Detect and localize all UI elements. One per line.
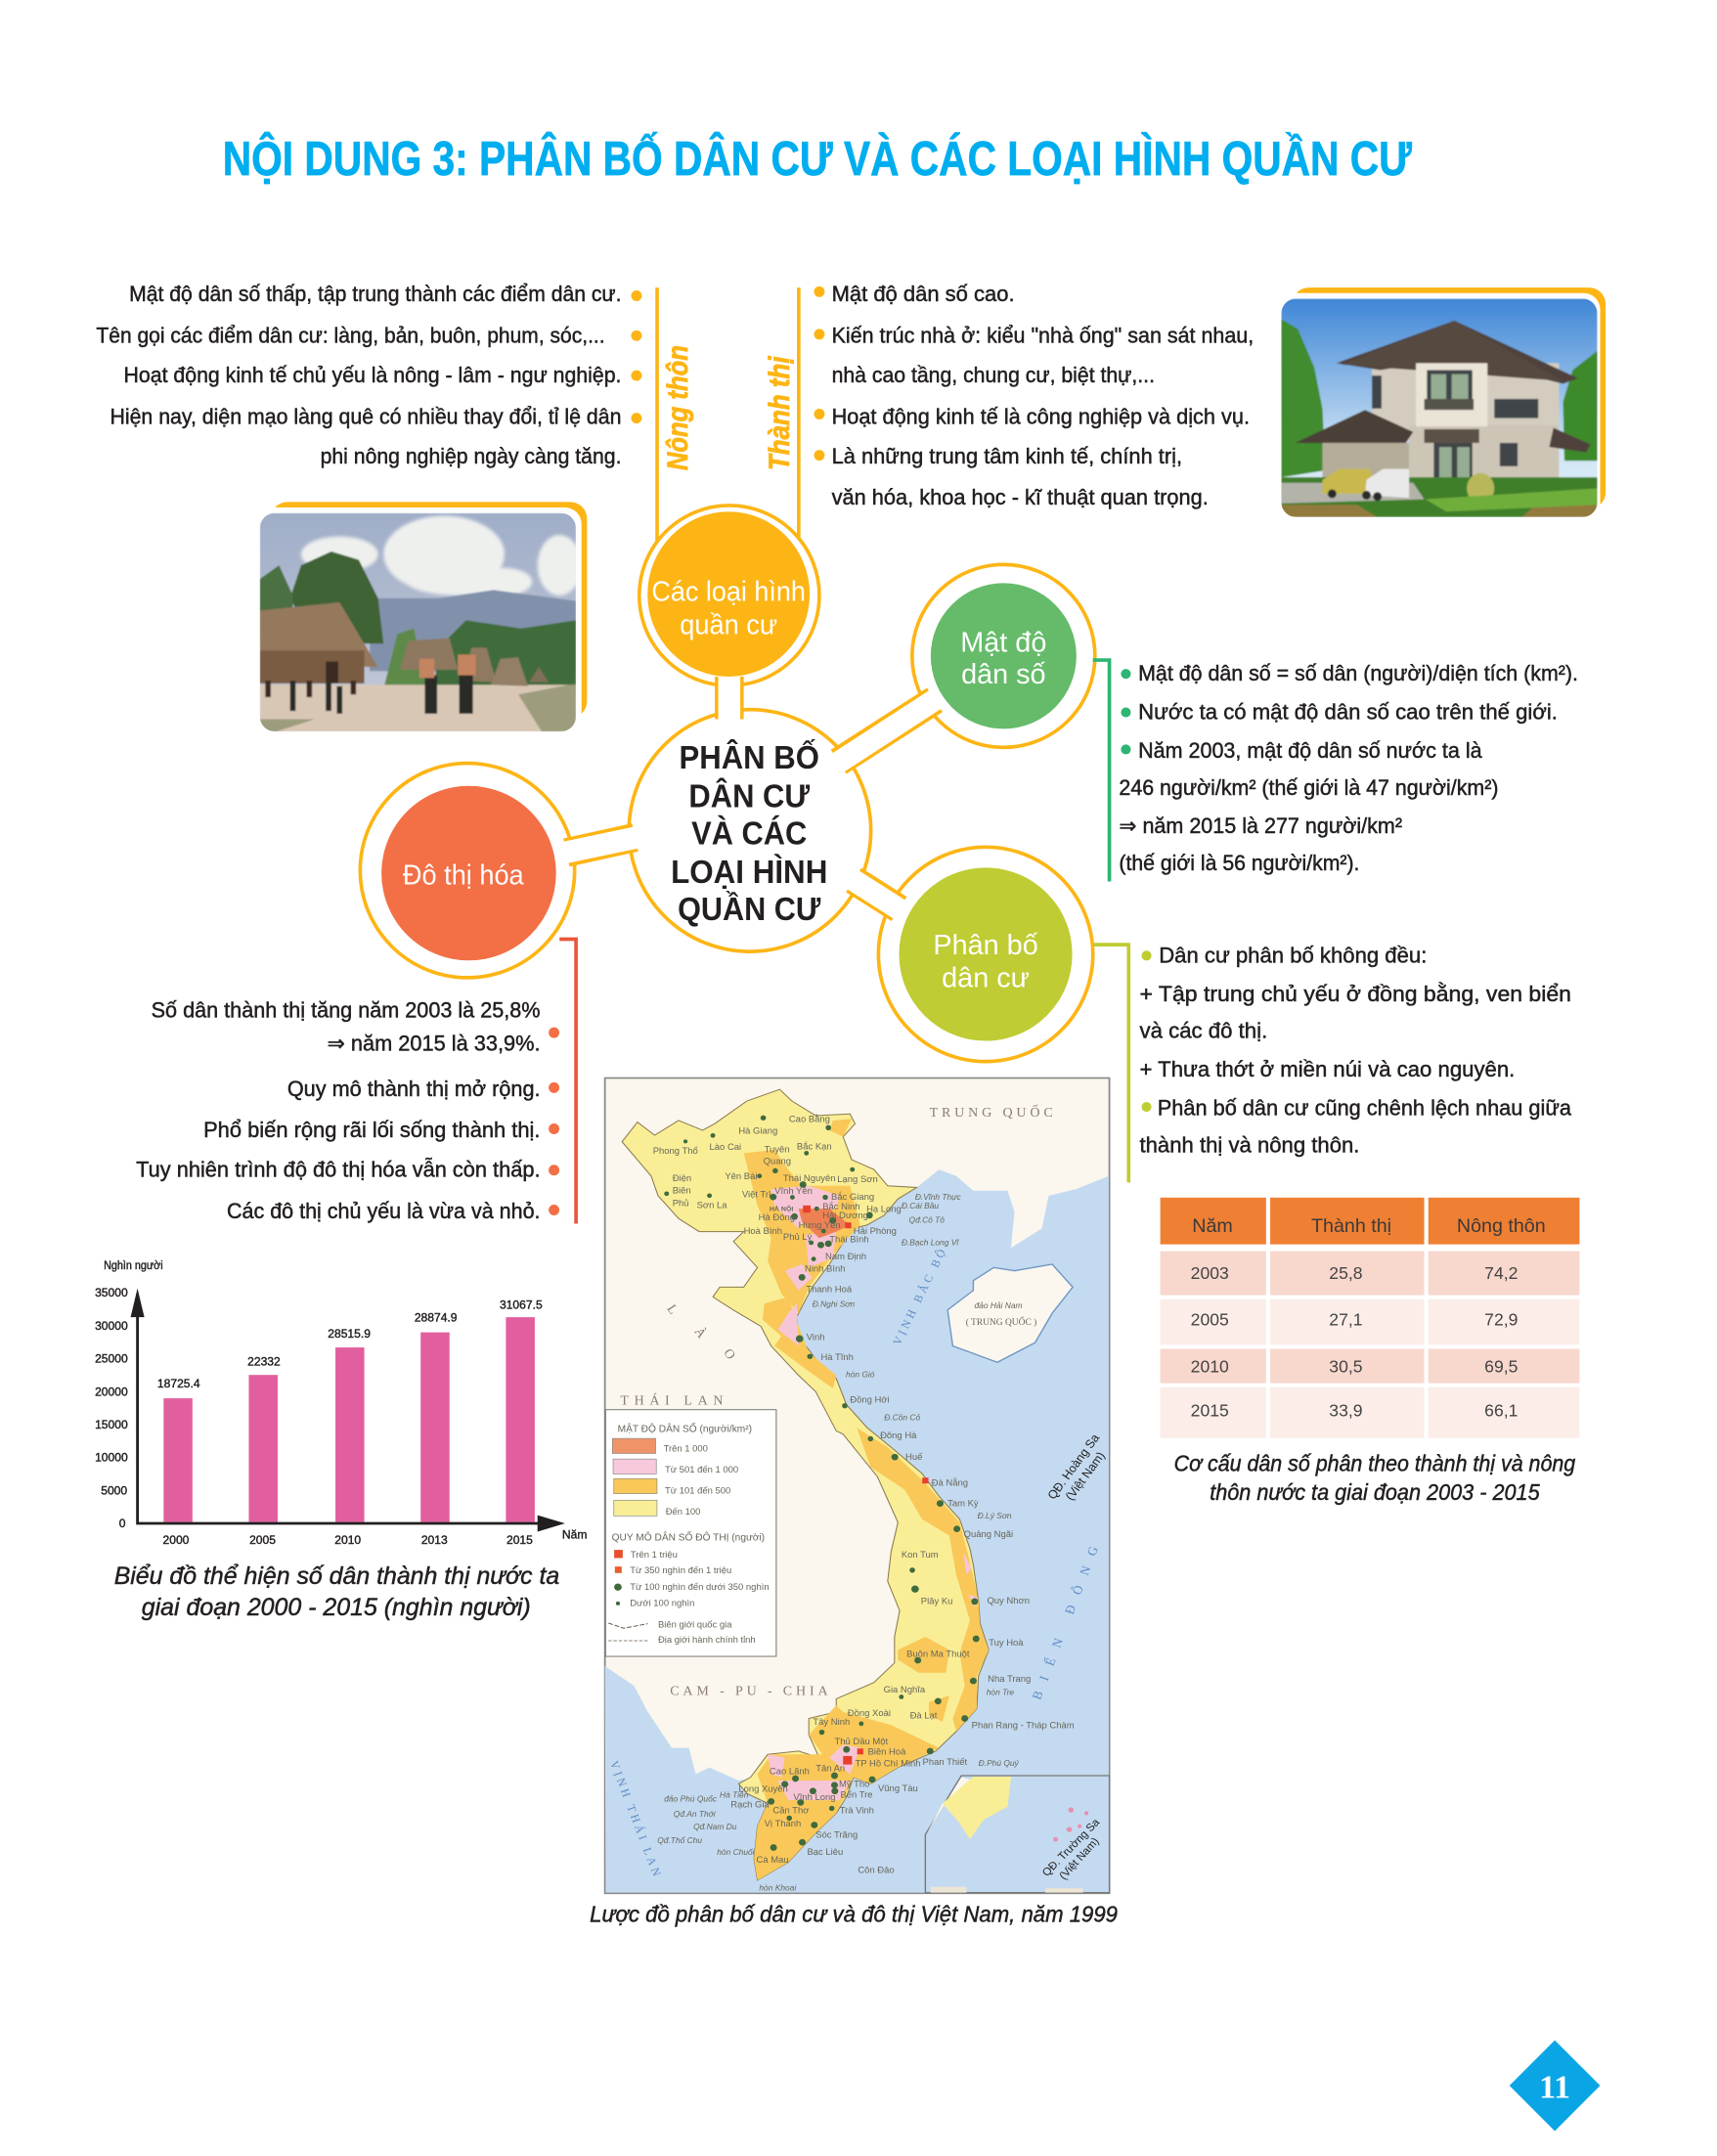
place labels: Cao Bằng	[789, 1115, 830, 1124]
place labels: Hải Dương	[822, 1210, 868, 1220]
place labels: Tuyên	[765, 1145, 790, 1155]
legend: MẬT ĐỘ DÂN SỐ (người/km²)	[618, 1424, 752, 1434]
place labels: Lào Cai	[710, 1142, 741, 1152]
place labels	[653, 1115, 1075, 1893]
country and sea labels: L	[664, 1301, 683, 1319]
connector pipes	[558, 671, 943, 914]
place labels: Rạch Giá	[730, 1800, 770, 1810]
place labels: Hoà Bình	[744, 1226, 782, 1236]
place labels: Đông Hà	[880, 1430, 917, 1440]
table: urban and rural structure: Thành thị	[1311, 1215, 1391, 1237]
place labels: Thủ Dầu Một	[834, 1737, 889, 1746]
country and sea labels: QĐ. Hoàng Sa	[1045, 1431, 1102, 1502]
place labels: Trà Vinh	[840, 1806, 874, 1815]
node: urbanization: Đô thị hóa	[403, 859, 525, 891]
text block: density: Nước ta có mật độ dân số cao trên thế giới.	[1138, 700, 1558, 725]
place labels: Đ.Cồn Cỏ	[884, 1414, 921, 1423]
text block: distribution: + Thưa thớt ở miền núi và cao nguyên.	[1140, 1057, 1515, 1081]
place labels: Đồng Hới	[850, 1395, 890, 1404]
bracket: distribution	[1093, 945, 1128, 1182]
density patches: over 1000	[799, 1209, 850, 1238]
bar chart: urban population: Nghìn người	[104, 1258, 163, 1272]
place labels: Cần Thơ	[772, 1806, 809, 1815]
table caption: Cơ cấu dân số phân theo thành thị và nông	[1174, 1451, 1575, 1476]
node: urbanization	[381, 786, 556, 960]
place labels: Bạc Liêu	[807, 1847, 843, 1857]
place labels: Đ.Nghi Sơn	[813, 1300, 855, 1308]
place labels: Hạ Long	[866, 1205, 902, 1213]
inset map	[925, 1776, 1110, 1893]
legend: Từ 501 đến 1 000	[665, 1465, 738, 1474]
table: urban and rural structure	[1161, 1198, 1579, 1438]
central node: VÀ CÁC	[691, 814, 807, 852]
legend: Đến 100	[666, 1507, 700, 1517]
legend: Biên giới quốc gia	[658, 1620, 732, 1630]
place labels: HÀ NỘI	[770, 1205, 793, 1212]
place labels: Qđ.Nam Du	[693, 1823, 737, 1831]
table: urban and rural structure: 2005	[1191, 1310, 1229, 1330]
place labels: Đ.Bạch Long Vĩ	[902, 1239, 960, 1248]
vertical label: Nông thôn: Nông thôn	[662, 345, 694, 470]
place labels: hòn Tre	[987, 1689, 1015, 1696]
bar chart: urban population: 2005	[249, 1533, 276, 1547]
place labels: Mỹ Tho	[839, 1780, 869, 1789]
legend: Dưới 100 nghìn	[630, 1599, 694, 1608]
country and sea labels: (Việt Nam)	[1057, 1835, 1102, 1882]
title: NỘI DUNG 3: PHÂN BỐ DÂN CƯ VÀ CÁC LOẠI HÌNH QUẦN CƯ	[223, 130, 1412, 186]
text block: urbanization: Các đô thị chủ yếu là vừa và nhỏ.	[227, 1199, 541, 1223]
place labels: Qđ.Cô Tô	[909, 1216, 945, 1225]
place labels: Long Xuyên	[738, 1784, 788, 1794]
place labels: Phong Thổ	[653, 1146, 698, 1156]
table: urban and rural structure: Năm	[1192, 1215, 1233, 1237]
place labels: Đ.Phú Quý	[979, 1759, 1020, 1768]
legend: Địa giới hành chính tỉnh	[658, 1635, 756, 1645]
connector lines to settlement types	[657, 287, 799, 544]
bar chart: urban population: 20000	[95, 1385, 128, 1398]
table: urban and rural structure: 72,9	[1484, 1310, 1518, 1330]
place labels: Buôn Ma Thuột	[906, 1650, 970, 1659]
place labels: Gia Nghĩa	[884, 1685, 926, 1694]
text block: urban settlement: Hoạt động kinh tế là công nghiệp và dịch vụ.	[832, 404, 1250, 428]
place labels: Qđ.Thổ Chu	[657, 1835, 702, 1845]
place labels: Đồng Xoài	[848, 1708, 891, 1718]
text block: rural: phi nông nghiệp ngày càng tăng.	[321, 444, 621, 468]
bar chart: urban population: Năm	[562, 1527, 587, 1541]
country and sea labels: (Việt Nam)	[1063, 1449, 1108, 1503]
country and sea labels: BIỂN ĐÔNG	[1029, 1533, 1105, 1701]
place labels: Bắc Giang	[831, 1192, 874, 1202]
table: urban and rural structure: 33,9	[1329, 1400, 1362, 1420]
place labels: Tây Ninh	[813, 1717, 850, 1727]
table: urban and rural structure: Nông thôn	[1457, 1215, 1546, 1237]
place labels: Cà Mau	[757, 1855, 789, 1865]
place labels: Thanh Hoá	[806, 1285, 853, 1294]
place labels: Hưng Yên	[799, 1220, 841, 1230]
node: population density: Mật độ	[960, 628, 1046, 659]
city markers	[664, 1116, 980, 1851]
place labels: Tân An	[815, 1764, 845, 1774]
place labels: Vĩnh Long	[793, 1792, 836, 1802]
place labels: Nha Trang	[988, 1674, 1031, 1684]
page number: 11	[1539, 2070, 1570, 2106]
node: population distribution: Phân bố	[933, 930, 1038, 961]
text block: urbanization: Tuy nhiên trình độ đô thị hóa vẫn còn thấp.	[136, 1158, 541, 1182]
central node: QUẦN CƯ	[678, 891, 820, 928]
place labels: Lạng Sơn	[837, 1174, 878, 1184]
place labels: Quy Nhơn	[987, 1596, 1030, 1606]
bar chart: urban population: 22332	[247, 1354, 281, 1368]
text block: rural: Hoạt động kinh tế chủ yếu là nông - lâm - ngư nghiệp.	[124, 363, 621, 387]
place labels: Ninh Bình	[805, 1264, 846, 1273]
place labels: hòn Khoai	[759, 1884, 796, 1893]
place labels: đảo Hải Nam	[974, 1301, 1023, 1310]
text block: distribution: + Tập trung chủ yếu ở đồng bằng, ven biển	[1140, 982, 1571, 1006]
chart caption: giai đoạn 2000 - 2015 (nghìn người)	[142, 1594, 531, 1621]
chart caption: Biểu đồ thể hiện số dân thành thị nước ta	[114, 1562, 559, 1590]
place labels: Bắc Ninh	[822, 1202, 860, 1211]
bar chart: urban population	[95, 1258, 587, 1547]
table: urban and rural structure: 69,5	[1484, 1356, 1519, 1376]
place labels: Côn Đảo	[858, 1866, 895, 1875]
table caption: thôn nước ta giai đoạn 2003 - 2015	[1210, 1479, 1540, 1505]
photo: village	[254, 502, 587, 737]
text block: rural	[96, 282, 641, 468]
place labels: Hà Giang	[738, 1126, 777, 1135]
table caption	[1174, 1451, 1575, 1505]
place labels: Đà Nẵng	[932, 1478, 968, 1488]
bar chart: urban population: 15000	[95, 1418, 128, 1431]
bar chart: urban population: 5000	[101, 1483, 127, 1497]
place labels: Nam Định	[825, 1252, 866, 1261]
place labels: Plây Ku	[921, 1597, 952, 1606]
place labels: Vũng Tàu	[878, 1783, 918, 1793]
place labels: Đà Lạt	[910, 1711, 938, 1720]
outer rings of concept map	[360, 506, 1095, 1062]
text block: urban settlement: Mật độ dân số cao.	[832, 282, 1015, 306]
place labels: Kon Tum	[902, 1550, 939, 1560]
place labels: Hải Phòng	[854, 1226, 897, 1236]
bracket: urbanization	[559, 940, 576, 1224]
legend: Từ 350 nghìn đến 1 triệu	[630, 1565, 731, 1575]
legend: Từ 101 đến 500	[665, 1486, 730, 1496]
text block: density: Năm 2003, mật độ dân số nước ta là	[1138, 738, 1482, 763]
place labels: hòn Chuối	[717, 1847, 755, 1857]
text block: urban settlement	[814, 282, 1254, 509]
country and sea labels	[607, 1103, 1108, 1882]
place labels: Đ.Lý Sơn	[978, 1512, 1012, 1520]
table: urban and rural structure: 2010	[1191, 1356, 1229, 1376]
place labels: Đ.Cái Bầu	[902, 1202, 940, 1210]
text block: rural: Mật độ dân số thấp, tập trung thành các điểm dân cư.	[129, 282, 621, 306]
place labels: Quảng Ngãi	[964, 1529, 1013, 1539]
vertical label: Thành thị: Thành thị	[764, 356, 796, 470]
legend: Trên 1 triệu	[631, 1550, 678, 1560]
bar chart: urban population: 28515.9	[328, 1327, 371, 1341]
place labels: Phủ	[673, 1199, 689, 1208]
bar chart: urban population: 18725.4	[157, 1377, 200, 1390]
text block: urbanization: ⇒ năm 2015 là 33,9%.	[328, 1031, 541, 1055]
central node	[671, 738, 827, 928]
place labels: Tuy Hoà	[989, 1638, 1024, 1648]
density patches: 101-500	[744, 1119, 989, 1880]
central node: DÂN CƯ	[688, 778, 810, 815]
place labels: Tam Kỳ	[947, 1498, 979, 1508]
table: urban and rural structure: 30,5	[1329, 1356, 1363, 1376]
place labels: Đ.Vĩnh Thực	[915, 1193, 962, 1202]
bar chart: urban population: 31067.5	[500, 1298, 543, 1312]
place labels: Hà Tĩnh	[820, 1352, 854, 1362]
place labels: Yên Bái	[725, 1171, 757, 1181]
place labels: Vị Thanh	[765, 1819, 801, 1828]
text block: distribution: Dân cư phân bố không đều:	[1159, 943, 1427, 967]
central node: PHÂN BỐ	[680, 738, 819, 776]
photo: house	[1276, 287, 1606, 523]
bar chart: urban population: 10000	[95, 1451, 128, 1465]
place labels: Điện	[673, 1173, 691, 1183]
bar chart: urban population: 2015	[506, 1533, 533, 1547]
Vietnam mainland	[622, 1089, 989, 1880]
text block: urban settlement: Là những trung tâm kinh tế, chính trị,	[832, 444, 1182, 468]
country and sea labels: QĐ. Trường Sa	[1040, 1817, 1103, 1879]
table: urban and rural structure: 27,1	[1329, 1310, 1362, 1330]
place labels: Qđ.An Thới	[674, 1810, 716, 1819]
text block: density: (thế giới là 56 người/km²).	[1119, 851, 1359, 875]
place labels: Cao Lãnh	[770, 1767, 810, 1776]
place labels: TP Hồ Chí Minh	[856, 1759, 921, 1769]
text block: distribution	[1140, 943, 1572, 1157]
bar chart: urban population: 30000	[95, 1319, 128, 1333]
legend: Trên 1 000	[664, 1444, 708, 1453]
country and sea labels: À	[691, 1324, 713, 1343]
bar chart: urban population: 28874.9	[415, 1310, 458, 1324]
text block: urban settlement: văn hóa, khoa học - kĩ thuật quan trọng.	[832, 485, 1209, 509]
place labels: Thái Bình	[829, 1235, 869, 1245]
place labels: Bắc Kạn	[797, 1142, 832, 1151]
bar chart: urban population: 0	[119, 1517, 126, 1530]
page number	[1510, 2041, 1600, 2131]
text block: urbanization: Quy mô thành thị mở rộng.	[287, 1077, 541, 1101]
place labels: đảo Phú Quốc	[664, 1794, 718, 1804]
node: population distribution: dân cư	[942, 963, 1030, 994]
place labels: Sơn La	[697, 1201, 727, 1210]
place labels: Vĩnh Yên	[774, 1186, 813, 1196]
table: urban and rural structure: 25,8	[1329, 1263, 1362, 1283]
place labels: Quang	[764, 1157, 791, 1166]
country and sea labels: THÁI LAN	[620, 1392, 728, 1408]
map caption: Lược đồ phân bố dân cư và đô thị Việt Nam, năm 1999	[590, 1902, 1118, 1927]
text block: distribution: và các đô thị.	[1140, 1019, 1267, 1043]
place labels: Phan Thiết	[923, 1757, 968, 1767]
place labels: Hà Đông	[759, 1212, 795, 1222]
node: settlement types: quần cư	[680, 609, 777, 640]
text block: rural: Hiện nay, diện mạo làng quê có nhiều thay đổi, tỉ lệ dân	[110, 404, 621, 428]
place labels: hòn Gió	[846, 1370, 875, 1379]
sea	[605, 1169, 1109, 1893]
text block: urbanization: Số dân thành thị tăng năm 2003 là 25,8%	[152, 998, 541, 1023]
bracket: density	[1093, 660, 1110, 881]
bar chart: urban population: 25000	[95, 1352, 128, 1366]
country and sea labels: VỊNH THÁI LAN	[607, 1759, 665, 1881]
bar chart: urban population: 2013	[421, 1533, 448, 1547]
place labels: Huế	[905, 1452, 922, 1462]
map of Vietnam	[605, 1078, 1110, 1893]
node: population distribution	[899, 867, 1073, 1041]
text block: distribution: Phân bố dân cư cũng chênh lệch nhau giữa	[1158, 1095, 1572, 1120]
text block: urban settlement: nhà cao tầng, chung cư, biệt thự,...	[832, 363, 1155, 387]
legend: Từ 100 nghìn đến dưới 350 nghìn	[630, 1582, 770, 1592]
Hainan island	[947, 1264, 1073, 1362]
text block: urban settlement: Kiến trúc nhà ở: kiểu "nhà ống" san sát nhau,	[832, 323, 1254, 347]
node: population density	[931, 583, 1077, 728]
country and sea labels: CAM - PU - CHIA	[670, 1684, 831, 1697]
legend: QUY MÔ DÂN SỐ ĐÔ THỊ (người)	[612, 1532, 765, 1544]
text block: urbanization	[136, 998, 559, 1223]
place labels: Hà Tiên	[720, 1791, 749, 1800]
place labels: Sóc Trăng	[815, 1830, 858, 1839]
country and sea labels: TRUNG QUỐC	[930, 1103, 1057, 1120]
table: urban and rural structure: 2015	[1191, 1400, 1229, 1420]
country and sea labels: O	[721, 1346, 741, 1365]
node: population density: dân số	[961, 659, 1046, 690]
central node: LOẠI HÌNH	[671, 854, 827, 891]
chart caption	[114, 1562, 559, 1621]
density patches: 501-1000	[768, 1186, 978, 1800]
bar chart: urban population: 2010	[334, 1533, 361, 1547]
text block: density: ⇒ năm 2015 là 277 người/km²	[1119, 814, 1402, 838]
place labels: ( TRUNG QUỐC )	[966, 1317, 1036, 1327]
text block: urbanization: Phổ biến rộng rãi lối sống thành thị.	[203, 1118, 541, 1142]
text block: distribution: thành thị và nông thôn.	[1140, 1132, 1359, 1157]
legend	[605, 1410, 776, 1656]
place labels: Phủ Lý	[783, 1232, 813, 1242]
text block: density: 246 người/km² (thế giới là 47 người/km²)	[1119, 775, 1498, 800]
node: settlement types: Các loại hình	[651, 577, 806, 608]
place labels: Biên Hoà	[867, 1746, 906, 1756]
text block: density	[1119, 661, 1578, 875]
node: settlement types	[647, 511, 810, 677]
table: urban and rural structure: 2003	[1191, 1263, 1229, 1283]
place labels: Biên	[673, 1186, 691, 1195]
place labels: Phan Rang - Tháp Chàm	[972, 1721, 1075, 1730]
country and sea labels: VỊNH BẮC BỘ	[889, 1244, 950, 1347]
place labels: Thái Nguyên	[783, 1173, 836, 1183]
place labels: Việt Trì	[742, 1190, 771, 1199]
text block: density: Mật độ dân số = số dân (người)/diện tích (km²).	[1138, 661, 1578, 685]
table: urban and rural structure: 74,2	[1484, 1263, 1518, 1283]
bar chart: urban population: 35000	[95, 1286, 128, 1299]
place labels: Bến Tre	[840, 1790, 873, 1799]
table: urban and rural structure: 66,1	[1484, 1400, 1518, 1420]
bar chart: urban population: 2000	[163, 1533, 190, 1547]
text block: rural: Tên gọi các điểm dân cư: làng, bản, buôn, phum, sóc,...	[96, 323, 605, 347]
place labels: Vinh	[807, 1333, 825, 1342]
